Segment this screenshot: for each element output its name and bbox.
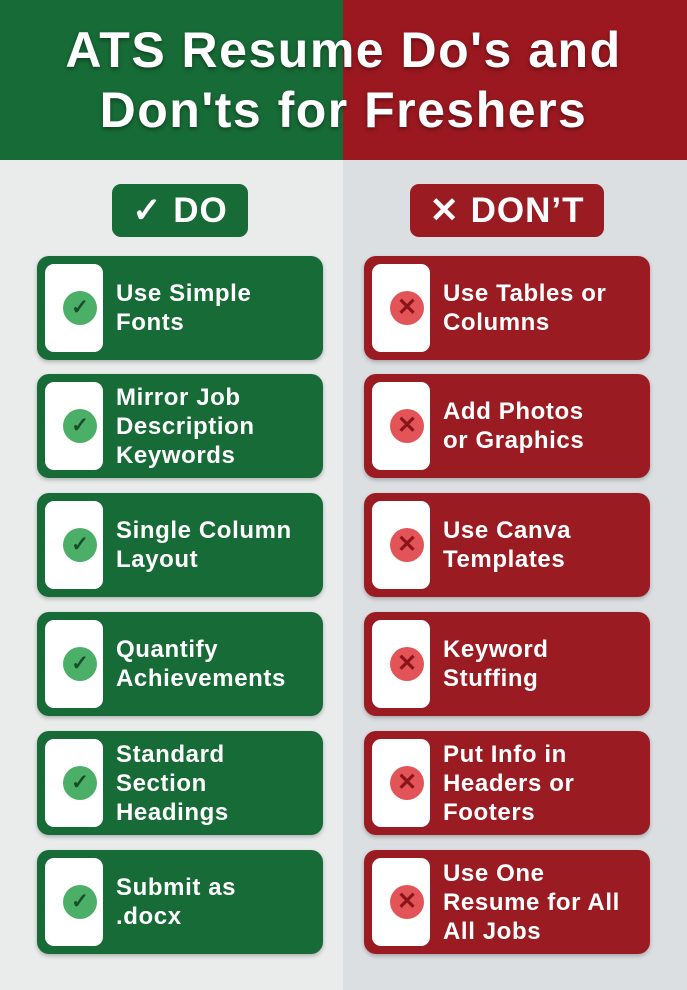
card: do 5: Section: [116, 770, 207, 796]
card: do 2: Keywords: [116, 442, 236, 468]
card: dont 5: Put Info in: [443, 740, 567, 768]
card: do 5: Standard: [116, 740, 225, 768]
card: dont 1: ✕: [397, 294, 417, 321]
card: do 5: ✓: [71, 771, 89, 794]
title: Don'ts for Freshers: [100, 82, 587, 138]
card: do 3: Single Column: [116, 517, 292, 544]
card: do 6: ✓: [71, 890, 89, 913]
card: dont 3: Templates: [443, 546, 565, 573]
card: do 2: [37, 374, 323, 478]
card: dont 3: [364, 493, 650, 597]
badge: DON'T: ✕ DON’T: [430, 191, 584, 230]
card: dont 1: [364, 256, 650, 360]
card: dont 4: Stuffing: [443, 665, 538, 692]
card: do 4: Quantify: [116, 636, 218, 663]
title: ATS Resume Do's and: [65, 22, 622, 78]
card: dont 1: Columns: [443, 309, 550, 336]
card: dont 2: ✕: [397, 412, 417, 439]
card: do 1: Fonts: [116, 309, 184, 336]
card: do 1: Use Simple: [116, 280, 251, 307]
card: dont 2: Add Photos: [443, 398, 584, 425]
card: do 3: ✓: [71, 533, 89, 556]
card: dont 2: [364, 374, 650, 478]
card: do 6: [37, 850, 323, 954]
card: dont 4: ✕: [397, 650, 417, 677]
card: do 1: [37, 256, 323, 360]
card: do 1: ✓: [71, 296, 89, 319]
card: dont 6: [364, 850, 650, 954]
card: dont 4: Keyword: [443, 636, 549, 663]
card: dont 1: Use Tables or: [443, 280, 606, 307]
card: do 6: Submit as: [116, 874, 236, 901]
card: do 5: Headings: [116, 798, 229, 826]
card: dont 5: Footers: [443, 798, 535, 826]
card: do 2: ✓: [71, 414, 89, 437]
card: dont 4: [364, 612, 650, 716]
card: dont 6: All Jobs: [443, 918, 541, 944]
card: do 2: Mirror Job: [116, 384, 241, 410]
card: do 3: Layout: [116, 546, 198, 573]
title: [65, 22, 622, 138]
badge: DO: [112, 184, 248, 237]
card: dont 6: ✕: [397, 888, 417, 915]
card: do 2: Description: [116, 412, 255, 440]
card: do 6: .docx: [116, 903, 182, 930]
badge: DON'T: [410, 184, 604, 237]
card: do 4: [37, 612, 323, 716]
card: do 3: [37, 493, 323, 597]
badge: DO: ✓ DO: [132, 191, 228, 230]
card: dont 3: ✕: [397, 531, 417, 558]
card: dont 6: Resume for All: [443, 888, 620, 916]
card: dont 5: [364, 731, 650, 835]
card: do 4: ✓: [71, 652, 89, 675]
card: dont 5: Headers or: [443, 770, 574, 796]
card: do 4: Achievements: [116, 665, 286, 692]
card: dont 2: or Graphics: [443, 427, 584, 454]
card: dont 6: Use One: [443, 860, 545, 886]
header: [0, 0, 687, 160]
card: dont 5: ✕: [397, 769, 417, 796]
card: do 5: [37, 731, 323, 835]
card: dont 3: Use Canva: [443, 517, 571, 544]
